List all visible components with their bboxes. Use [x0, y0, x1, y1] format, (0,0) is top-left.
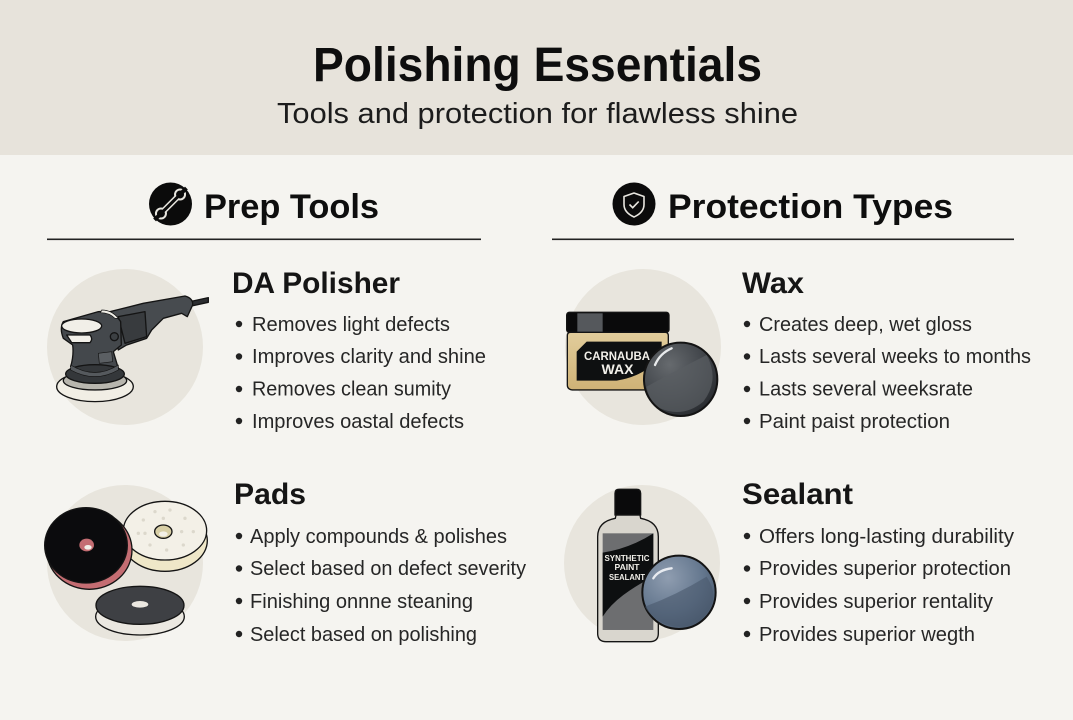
bottle label: SYNTHETIC	[604, 553, 650, 563]
bullet list: Select based on polishing	[250, 623, 477, 646]
bullet list	[744, 313, 1031, 433]
heading: Sealant	[742, 478, 853, 511]
panel: Sealant	[564, 478, 1015, 646]
icon: carnauba wax jar	[565, 269, 721, 425]
column heading: Prep Tools	[47, 182, 481, 240]
bullet list: Provides superior protection	[759, 557, 1011, 580]
icon: DA polisher	[47, 269, 208, 425]
bullet list: Provides superior rentality	[759, 590, 994, 613]
column heading: Protection Types	[552, 182, 1014, 240]
bullet list: Finishing onnne steaning	[250, 590, 473, 613]
panel: Pads	[45, 478, 527, 646]
bullet list	[236, 313, 486, 433]
heading: Wax	[742, 267, 804, 300]
icon: polishing pads	[45, 485, 207, 641]
bullet list: Improves clarity and shine	[252, 345, 486, 368]
icon: carnauba wax jar: WAX	[602, 361, 634, 377]
bullet list: Provides superior wegth	[759, 623, 975, 646]
bullet list: Improves oastal defects	[252, 410, 464, 433]
column heading: Protection Types: Protection Types	[668, 188, 953, 226]
bullet list	[236, 525, 527, 646]
bullet list	[744, 525, 1015, 646]
icon: shield	[612, 182, 656, 226]
jar label: CARNAUBA	[584, 351, 650, 363]
bullet list: Offers long-lasting durability	[759, 525, 1015, 548]
icon: synthetic paint sealant bottle	[564, 485, 720, 642]
icon: synthetic paint sealant bottle: SEALANT	[609, 572, 646, 582]
icon: wrench	[149, 182, 192, 226]
bullet list: Lasts several weeks to months	[759, 345, 1031, 368]
heading: DA Polisher	[232, 267, 400, 300]
column heading: Prep Tools: Prep Tools	[204, 188, 379, 226]
header band	[0, 0, 1073, 155]
bullet list: Creates deep, wet gloss	[759, 313, 972, 336]
bullet list: Removes clean sumity	[252, 378, 452, 400]
bullet list: Select based on defect severity	[250, 557, 527, 580]
title: Polishing Essentials	[313, 39, 762, 92]
panel: Wax	[565, 267, 1031, 433]
icon: synthetic paint sealant bottle: PAINT	[614, 562, 640, 572]
bullet list: Paint paist protection	[759, 410, 950, 433]
bullet list: Removes light defects	[252, 313, 450, 336]
subtitle: Tools and protection for flawless shine	[277, 98, 798, 130]
heading: Pads	[234, 478, 306, 511]
bullet list: Apply compounds & polishes	[250, 525, 507, 548]
panel: DA Polisher	[47, 267, 486, 433]
bullet list: Lasts several weeksrate	[759, 378, 973, 400]
